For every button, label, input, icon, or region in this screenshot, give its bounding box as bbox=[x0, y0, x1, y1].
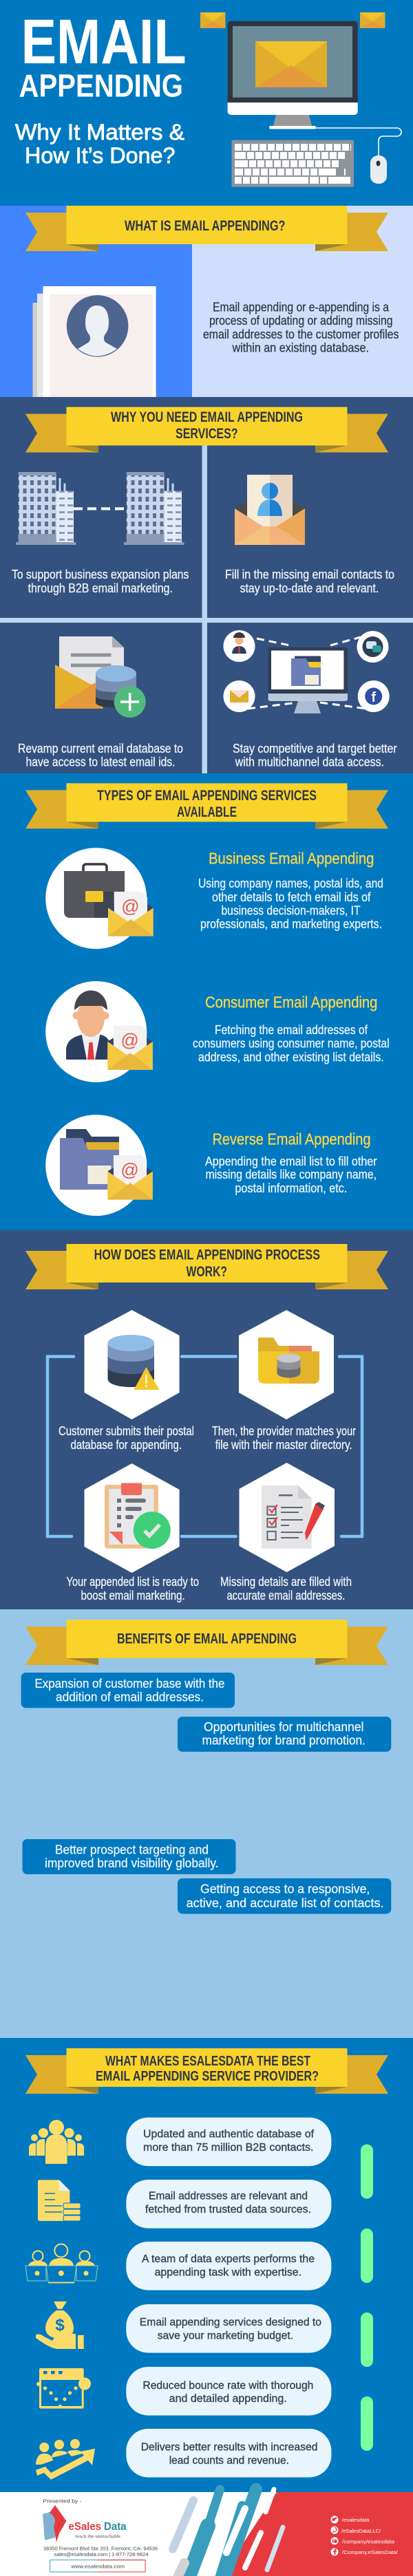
step 3: clipboard hexagon bbox=[84, 1463, 180, 1573]
text: definition bbox=[203, 301, 399, 354]
text: fill missing contacts: Fill in the missing email contacts to bbox=[225, 568, 394, 581]
callout: customer base: addition of email addresses. bbox=[56, 1690, 204, 1704]
title: Appending: APPENDING bbox=[19, 67, 183, 103]
text: business email appending: Using company names, postal ids, and bbox=[198, 877, 383, 890]
callout: multichannel bbox=[178, 1717, 391, 1752]
icon: consumer person: @ bbox=[120, 1029, 139, 1050]
icon: rising leads bbox=[36, 2439, 95, 2480]
step 4 text bbox=[220, 1575, 352, 1602]
pill: better results: lead counts and revenue. bbox=[169, 2455, 289, 2467]
step 3 text: boost email marketing. bbox=[81, 1589, 185, 1602]
icon: connected buildings bbox=[16, 472, 184, 545]
pill: better results: Delivers better results with increased bbox=[141, 2441, 317, 2453]
website box bbox=[50, 2560, 145, 2572]
icon: monitor bbox=[228, 21, 358, 129]
pill: relevant addresses: fetched from trusted data sources. bbox=[145, 2204, 311, 2215]
step 1: database hexagon bbox=[84, 1310, 180, 1419]
logo: eSales Data: eSales bbox=[69, 2521, 101, 2533]
website box: www.esalesdata.com bbox=[70, 2564, 125, 2570]
text: business expansion: through B2B email marketing. bbox=[28, 581, 173, 595]
callout: accurate contacts: active, and accurate list of contacts. bbox=[187, 1896, 384, 1910]
banner: what is email appending bbox=[25, 206, 388, 251]
section: hero bbox=[0, 0, 413, 206]
section: types of email appending bbox=[0, 773, 413, 1230]
pill: database bbox=[126, 2118, 331, 2166]
pill: team of experts: appending task with expertise. bbox=[155, 2267, 301, 2279]
step 2 text bbox=[212, 1424, 356, 1452]
logo: eSales Data: Data bbox=[104, 2521, 127, 2533]
icon: business briefcase: @ bbox=[121, 896, 140, 916]
text: business expansion bbox=[12, 568, 189, 595]
pill: database: more than 75 million B2B contacts. bbox=[143, 2142, 313, 2154]
text: fill missing contacts bbox=[225, 568, 394, 595]
logo: eSales Data bbox=[43, 2505, 127, 2542]
section: what is email appending bbox=[0, 206, 413, 397]
text: revamp database bbox=[18, 742, 183, 769]
text: fill missing contacts: stay up-to-date and relevant. bbox=[240, 581, 379, 595]
text: definition: Email appending or e-appending is a bbox=[213, 301, 390, 314]
pill: team of experts bbox=[126, 2242, 331, 2290]
banner: what makes esalesdata the best: EMAIL APPENDING SERVICE PROVIDER? bbox=[96, 2069, 319, 2084]
step 1 text: Customer submits their postal bbox=[59, 1424, 194, 1438]
step 3 text: Your appended list is ready to bbox=[66, 1575, 199, 1589]
icon: consumer person bbox=[45, 981, 153, 1082]
text: contact details: 38350 Fremont Blvd Ste 203, Fremont, CA- 94536 bbox=[43, 2545, 158, 2551]
icon text: dollar sign: $ bbox=[55, 2316, 65, 2334]
decorative stripes bbox=[173, 2489, 283, 2576]
step 3 text bbox=[66, 1575, 199, 1602]
callout: prospect targeting bbox=[22, 1839, 235, 1874]
callout: accurate contacts bbox=[178, 1878, 391, 1914]
icon: keyboard bbox=[231, 140, 354, 187]
banner: types: AVAILABLE bbox=[177, 804, 237, 820]
section: why you need email appending bbox=[0, 397, 413, 773]
text: revamp database: have access to latest email ids. bbox=[26, 755, 175, 769]
pill: database: Updated and authentic database of bbox=[143, 2129, 315, 2140]
callout: accurate contacts: Getting access to a responsive, bbox=[200, 1882, 370, 1896]
icon: money bag on hand bbox=[36, 2301, 84, 2349]
text: consumer email appending bbox=[193, 994, 390, 1064]
logo: eSales Data: reach the unreachable bbox=[75, 2534, 120, 2540]
callout: prospect targeting: Better prospect targeting and bbox=[55, 1843, 209, 1857]
section: process bbox=[0, 1230, 413, 1609]
connector lines bbox=[47, 1357, 362, 1536]
section: benefits bbox=[0, 1609, 413, 2038]
text: definition: within an existing database. bbox=[232, 341, 369, 354]
banner: benefits bbox=[25, 1620, 388, 1665]
callout: customer base: Expansion of customer base with the bbox=[34, 1677, 224, 1690]
step 2 text: file with their master directory. bbox=[215, 1438, 352, 1452]
text: business email appending: Business Email Appending bbox=[209, 849, 374, 867]
banner: why you need bbox=[25, 407, 388, 453]
banner: why you need: SERVICES? bbox=[176, 426, 238, 442]
text: stay competitive bbox=[233, 742, 397, 769]
social links: /Company.eSalesData/ bbox=[342, 2549, 399, 2555]
text: reverse email appending bbox=[205, 1130, 377, 1195]
banner: how does it work: HOW DOES EMAIL APPENDING PROCESS bbox=[94, 1247, 320, 1263]
callout: prospect targeting: improved brand visibility globally. bbox=[45, 1856, 219, 1870]
text: presented by: Presented by - bbox=[43, 2498, 82, 2504]
text: business expansion: To support business expansion plans bbox=[12, 568, 189, 581]
social links bbox=[330, 2515, 399, 2555]
icon: reverse folder bbox=[45, 1115, 153, 1216]
subtitle: How It’s Done? bbox=[25, 143, 176, 168]
banner: what is email appending: WHAT IS EMAIL APPENDING? bbox=[125, 218, 285, 234]
pill: budget: save your marketing budget. bbox=[158, 2330, 293, 2341]
text: business email appending bbox=[198, 849, 383, 931]
icon: team with laptops bbox=[25, 2244, 98, 2283]
icon: small envelopes bbox=[200, 12, 385, 28]
text: reverse email appending: Reverse Email Appending bbox=[212, 1130, 370, 1148]
text: reverse email appending: Appending the email list to fill other bbox=[205, 1155, 377, 1168]
icon: profile document bbox=[33, 286, 156, 397]
text: stay competitive: Stay competitive and target better bbox=[233, 742, 397, 755]
pill: relevant addresses bbox=[126, 2180, 331, 2229]
social links: /company/esalesdata bbox=[342, 2539, 395, 2544]
banner: benefits: BENEFITS OF EMAIL APPENDING bbox=[117, 1631, 297, 1647]
step 4 text: accurate email addresses. bbox=[227, 1589, 345, 1602]
pill: budget bbox=[126, 2304, 331, 2353]
section: footer bbox=[0, 2489, 413, 2576]
text: business email appending: business decision-makers, IT bbox=[222, 904, 361, 918]
text: reverse email appending: missing details like company name, bbox=[205, 1168, 377, 1181]
step 2: folder hexagon bbox=[239, 1310, 334, 1419]
icon: multichannel monitor bbox=[223, 630, 390, 713]
text: definition: process of updating or adding missing bbox=[209, 314, 393, 328]
icon: business briefcase bbox=[45, 848, 153, 949]
banner: how does it work bbox=[25, 1244, 388, 1289]
pill: better results bbox=[126, 2429, 331, 2478]
text: revamp database: Revamp current email database to bbox=[18, 742, 183, 755]
subtitle: Why It Matters & bbox=[15, 120, 184, 144]
banner: types bbox=[25, 783, 388, 828]
text: consumer email appending: Fetching the email addresses of bbox=[215, 1023, 368, 1037]
callout: customer base bbox=[21, 1673, 235, 1708]
banner: why you need: WHY YOU NEED EMAIL APPENDING bbox=[111, 409, 303, 425]
text: contact details: sales@esalesdata.com | 1-877-728-9624 bbox=[54, 2551, 149, 2557]
social links: /esalesdata bbox=[342, 2517, 370, 2523]
step 1 text bbox=[59, 1424, 194, 1452]
icon: group of people bbox=[29, 2120, 84, 2164]
section: why esalesdata bbox=[0, 2038, 413, 2492]
icon: envelope with contact bbox=[235, 475, 305, 545]
text: consumer email appending: Consumer Email Appending bbox=[205, 994, 377, 1011]
icon: bounce window bbox=[36, 2368, 91, 2409]
banner: how does it work: WORK? bbox=[186, 1264, 227, 1280]
pill: relevant addresses: Email addresses are relevant and bbox=[149, 2191, 308, 2202]
callout: multichannel: marketing for brand promotion. bbox=[202, 1734, 366, 1748]
pill: team of experts: A team of data experts performs the bbox=[142, 2253, 315, 2265]
social links: /eSalesDataLLC/ bbox=[341, 2528, 381, 2534]
icon: document and database bbox=[38, 2180, 81, 2221]
banner: what makes esalesdata the best bbox=[25, 2048, 388, 2094]
text: stay competitive: with multichannel data access. bbox=[235, 755, 384, 769]
pill: bounce rate bbox=[126, 2367, 331, 2416]
pill: bounce rate: and detailed appending. bbox=[169, 2393, 287, 2405]
icon text: facebook: f bbox=[371, 690, 376, 705]
text: reverse email appending: postal information, etc. bbox=[235, 1181, 347, 1195]
icon: reverse folder: @ bbox=[120, 1159, 139, 1180]
banner: types: TYPES OF EMAIL APPENDING SERVICES bbox=[97, 788, 317, 804]
callout: multichannel: Opportunities for multichannel bbox=[204, 1720, 363, 1734]
text: business email appending: other details to fetch email ids of bbox=[212, 890, 371, 904]
step 1 text: database for appending. bbox=[71, 1438, 182, 1452]
text: contact details bbox=[43, 2545, 158, 2557]
text: consumer email appending: consumers using consumer name, postal bbox=[193, 1037, 390, 1051]
step 4: checklist hexagon bbox=[240, 1463, 335, 1572]
pill: bounce rate: Reduced bounce rate with thorough bbox=[142, 2380, 313, 2392]
title: Email: EMAIL bbox=[21, 7, 187, 77]
text: consumer email appending: address, and other existing list details. bbox=[198, 1050, 384, 1064]
subtitle bbox=[15, 120, 184, 168]
step 4 text: Missing details are filled with bbox=[220, 1575, 352, 1589]
text: business email appending: professionals, and marketing experts. bbox=[200, 917, 382, 931]
pill: budget: Email appending services designed to bbox=[140, 2317, 321, 2328]
step 2 text: Then, the provider matches your bbox=[212, 1424, 356, 1438]
icon: mouse and cable bbox=[316, 128, 401, 184]
green bars bbox=[361, 2145, 373, 2451]
banner: what makes esalesdata the best: WHAT MAKES ESALESDATA THE BEST bbox=[105, 2054, 310, 2069]
icon: email database with plus bbox=[55, 636, 146, 718]
